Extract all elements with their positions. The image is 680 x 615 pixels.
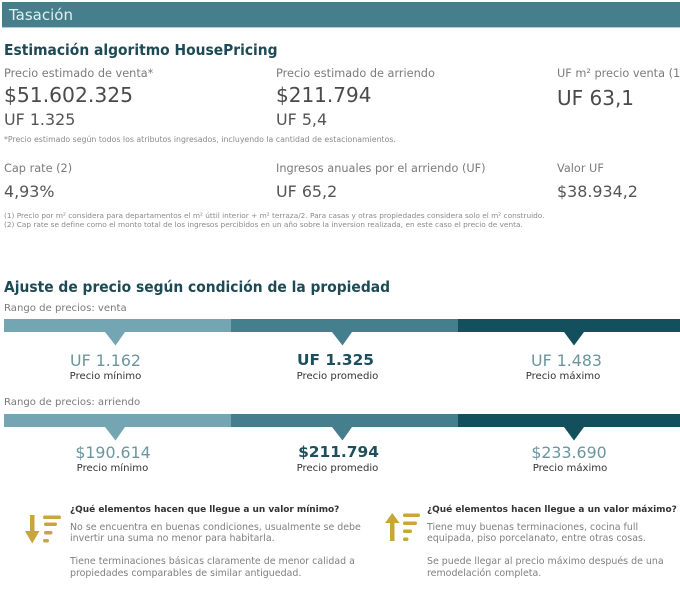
heading: Estimación algoritmo HousePricing: Estimación algoritmo HousePricing (4, 42, 278, 59)
range bar: arriendo (4, 414, 680, 440)
footnotes (1) and (2) (4, 211, 545, 229)
text block: valor mínimo (70, 504, 361, 579)
value: UF 1.325: UF 1.325 (297, 350, 374, 368)
question: ¿Qué elementos hacen llegue a un valor máximo? (427, 504, 677, 514)
label: rango venta: Rango de precios: venta (4, 302, 127, 314)
value: UF 1.162: UF 1.162 (70, 350, 141, 370)
value CLP: $51.602.325 (4, 83, 133, 107)
paragraph 2: Tiene terminaciones básicas claramente de menor calidad a (70, 556, 355, 567)
value: $38.934,2 (557, 182, 638, 201)
metric: cap rate (4, 162, 72, 201)
paragraph 2 (70, 556, 355, 579)
metric: UF m2 precio venta (557, 68, 680, 110)
caption: precio mínimo: Precio mínimo (77, 462, 148, 474)
caption: precio máximo: Precio máximo (526, 370, 600, 382)
caption: precio mínimo: Precio mínimo (70, 370, 141, 382)
value CLP: $211.794 (276, 83, 371, 107)
paragraph 1: equipada, piso porcelanato, entre otras cosas. (427, 533, 646, 544)
paragraph 2: propiedades comparables de similar antiguedad. (70, 568, 301, 579)
metric: valor UF (557, 162, 638, 201)
value UF: UF 1.325 (4, 110, 75, 129)
caption: precio máximo: Precio máximo (533, 462, 607, 474)
icon: sort down arrow (25, 515, 61, 544)
header bar: Tasación (2, 2, 680, 28)
value: UF 1.483: UF 1.483 (531, 350, 602, 370)
label: Cap rate (2) (4, 162, 72, 175)
metric: precio estimado de venta (4, 67, 153, 129)
value: $211.794: $211.794 (298, 443, 379, 461)
value: $190.614: $190.614 (75, 443, 151, 462)
label: Ingresos anuales por el arriendo (UF) (276, 162, 486, 175)
value: $233.690: $233.690 (531, 443, 607, 462)
footnote: precio estimado: *Precio estimado según todos los atributos ingresados, incluyendo la cantidad de estacionamientos. (4, 135, 396, 144)
label: Valor UF (557, 162, 604, 175)
paragraph 2: remodelación completa. (427, 568, 541, 579)
paragraph 1: Tiene muy buenas terminaciones, cocina full (427, 522, 638, 532)
paragraph 2 (427, 556, 664, 579)
heading: Ajuste de precio: Ajuste de precio según condición de la propiedad (4, 278, 390, 296)
paragraph 1: No se encuentra en buenas condiciones, usualmente se debe (70, 522, 361, 532)
question: ¿Qué elementos hacen que llegue a un valor mínimo? (70, 504, 339, 514)
footnote 1: (1) Precio por m² considera para departamentos el m² úttil interior + m² terraza/2. Para casas y otras propiedades considera solo el m² construido. (4, 211, 545, 220)
value UF: UF 5,4 (276, 110, 327, 129)
value: 4,93% (4, 182, 54, 201)
label: rango arriendo: Rango de precios: arriendo (4, 396, 140, 408)
footnote 2: (2) Cap rate se define como el monto total de los ingresos percibidos en un año sobre la inversion realizada, en este caso el precio de venta. (4, 220, 523, 229)
icon: sort up arrow (385, 513, 420, 541)
paragraph 1: invertir una suma no menor para habitarla. (70, 533, 275, 544)
value: UF 63,1 (557, 86, 634, 110)
label: Precio estimado de arriendo (276, 67, 435, 80)
text block: valor máximo (426, 504, 677, 579)
metric: precio estimado de arriendo (276, 67, 435, 129)
value: UF 65,2 (276, 182, 337, 201)
paragraph 2: Se puede llegar al precio máximo después de una (427, 556, 664, 567)
paragraph 1 (70, 522, 361, 544)
metric: ingresos anuales (276, 162, 486, 201)
caption: precio promedio: Precio promedio (297, 370, 378, 382)
range bar: venta (4, 319, 680, 346)
caption: precio promedio: Precio promedio (297, 462, 378, 474)
header title: Tasación (9, 6, 73, 24)
paragraph 1 (426, 522, 646, 544)
label: Precio estimado de venta* (4, 67, 153, 80)
